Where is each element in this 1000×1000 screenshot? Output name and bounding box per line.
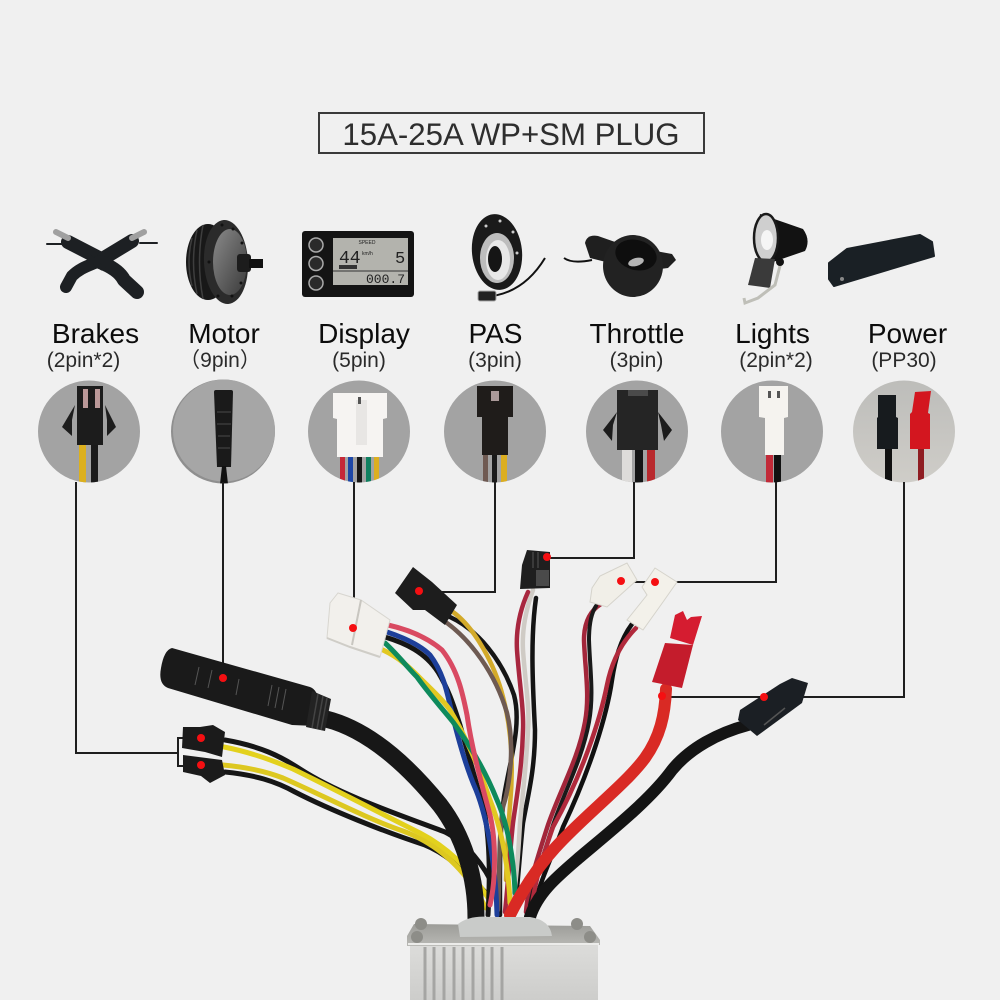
label: PAS: (3pin): [468, 349, 522, 372]
icon: brake levers: [47, 232, 157, 292]
leader: lights: [621, 482, 776, 582]
motor cable: [326, 719, 476, 918]
leader lines: [76, 482, 904, 766]
leader: motor: [222, 482, 224, 678]
icon: PAS sensor: [468, 212, 545, 301]
epoxy seal: [458, 917, 552, 937]
connector circle: PAS: [444, 380, 546, 484]
display wires: [383, 625, 515, 915]
label: Power: (PP30): [871, 349, 937, 372]
label: Brakes: (2pin*2): [47, 349, 120, 372]
PAS wires: [447, 612, 517, 915]
connector: light plug 2: [627, 568, 677, 630]
title: 15A-25A WP+SM PLUG: [342, 117, 680, 152]
leader: display: [353, 482, 355, 628]
heat-sink grooves: [425, 947, 502, 1000]
icon: LCD display: km/h: [362, 251, 373, 257]
connector: brake plugs: [182, 725, 225, 783]
connector circle: lights: [721, 380, 823, 484]
icon: LCD display: 000.7: [366, 272, 405, 287]
icon: hub motor: [186, 219, 263, 305]
label: Motor: （9pin）: [179, 349, 261, 372]
label: Brakes: Brakes: [52, 318, 139, 349]
controller box: [407, 917, 600, 1000]
label: Throttle: [590, 318, 684, 372]
wire harness: [223, 590, 748, 918]
throttle wires: [505, 590, 536, 915]
connector: throttle black plug: [520, 550, 550, 589]
red marker dots: [197, 553, 768, 769]
label: PAS: PAS: [469, 318, 522, 349]
light wires: [526, 604, 636, 912]
label: Motor: [179, 318, 261, 372]
connector: PAS black plug: [395, 567, 457, 625]
connector: black power plug: [738, 678, 808, 736]
connector circle: throttle: [586, 380, 688, 484]
connector circle: brakes: [38, 380, 140, 484]
connector: red power plug: [652, 611, 702, 688]
label: Display: (5pin): [332, 349, 386, 372]
leader: power: [662, 482, 904, 697]
label: Throttle: (3pin): [610, 349, 663, 372]
label: Display: Display: [318, 318, 410, 349]
label: Power: [868, 318, 947, 372]
connector: light plug 1: [590, 563, 637, 607]
connector circle: display: [308, 380, 410, 483]
connector: motor plug: [160, 648, 331, 731]
connector: display white plug: [327, 593, 390, 657]
leader: throttle: [547, 482, 634, 558]
label: PAS: [468, 318, 522, 372]
leader: PAS: [420, 482, 495, 592]
power cable red: [510, 689, 666, 915]
controller body: [410, 945, 598, 1000]
label: Lights: Lights: [735, 318, 810, 349]
brake wires: [223, 740, 495, 908]
label: Brakes: [47, 318, 139, 372]
label: Motor: Motor: [188, 318, 260, 349]
connector circle: power: [853, 380, 955, 484]
icon: LCD display: SPEED: [359, 240, 376, 246]
label: Throttle: Throttle: [590, 318, 684, 349]
label: Display: [318, 318, 410, 372]
icon: headlight: [744, 214, 808, 303]
label: Power: Power: [868, 318, 947, 349]
icon: thumb throttle: [564, 235, 676, 297]
label: Lights: [735, 318, 813, 372]
connector circle: motor: [171, 380, 275, 484]
power cable black: [530, 725, 748, 917]
screws: [411, 918, 596, 943]
leader: brakes: [76, 482, 186, 766]
label: Lights: (2pin*2): [739, 349, 813, 372]
icon: LCD display: [302, 231, 414, 297]
icon: LCD display: 5: [395, 250, 405, 269]
icon: battery: [829, 235, 934, 286]
icon: LCD display: 44: [339, 249, 361, 269]
top plate: [407, 924, 600, 946]
